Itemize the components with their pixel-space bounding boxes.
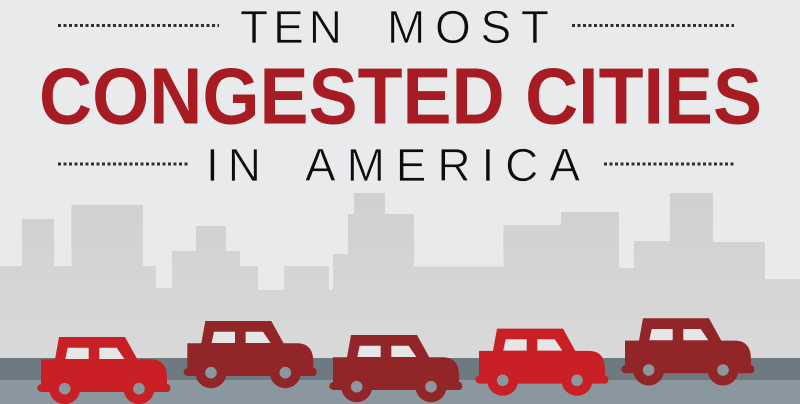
road — [0, 358, 800, 404]
divider: bottom right dotted line — [604, 162, 735, 166]
title: bottom line: IN — [206, 139, 261, 191]
divider: bottom left dotted line — [58, 162, 189, 166]
car 5: dark red — [621, 318, 754, 386]
car 3: dark red — [329, 335, 462, 402]
car 4: red — [475, 329, 608, 396]
divider: top left dotted line — [58, 24, 219, 27]
city skyline — [0, 193, 800, 360]
car 1: red — [37, 337, 170, 404]
title: bottom line: AMERICA — [305, 139, 580, 191]
divider: top right dotted line — [572, 24, 734, 27]
title: top line: MOST — [387, 1, 549, 53]
car 2: dark red — [184, 321, 317, 388]
title: top line — [240, 1, 549, 53]
title: top line: TEN — [240, 1, 342, 53]
